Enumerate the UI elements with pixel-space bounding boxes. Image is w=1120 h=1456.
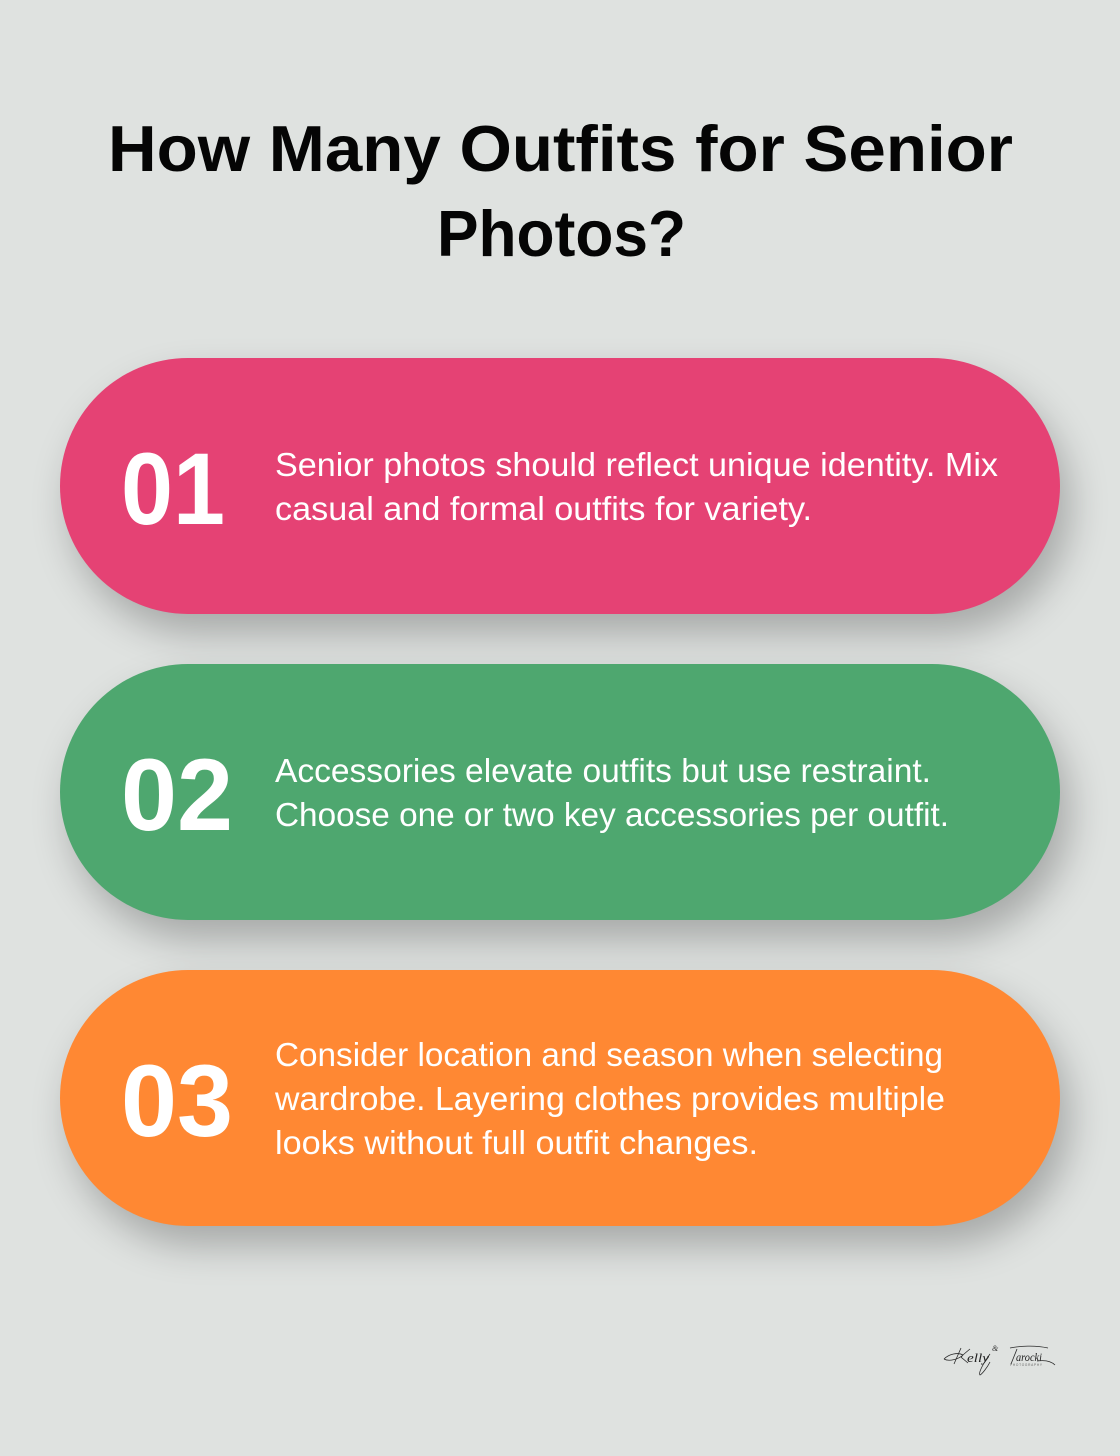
logo: Kelly & Tarocki Photography bbox=[944, 1344, 1056, 1376]
text block: step 03: looks without full outfit changes. bbox=[275, 1124, 758, 1161]
title: How Many Outfits for Senior bbox=[108, 112, 1013, 185]
text block: step 03: Consider location and season when selecting bbox=[275, 1036, 943, 1073]
number 01: 01 bbox=[121, 432, 225, 546]
title bbox=[108, 112, 1013, 270]
logo: Kelly & Tarocki Photography: PHOTOGRAPHY bbox=[1010, 1363, 1043, 1367]
text block: step 03 bbox=[274, 1036, 945, 1161]
text block: step 02: Choose one or two key accessories per outfit. bbox=[275, 796, 949, 833]
text block: step 03: wardrobe. Layering clothes provides multiple bbox=[274, 1080, 945, 1117]
number 03: 03 bbox=[121, 1044, 233, 1158]
text block: step 02 bbox=[275, 752, 949, 833]
panel: step 02 bbox=[60, 664, 1060, 920]
text block: step 01: casual and formal outfits for variety. bbox=[275, 490, 812, 527]
panel: step 01 bbox=[60, 358, 1060, 614]
logo: Kelly & Tarocki Photography: arocki bbox=[1016, 1350, 1042, 1364]
title: Photos? bbox=[437, 197, 686, 270]
logo: Kelly & Tarocki Photography: & bbox=[992, 1344, 999, 1353]
text block: step 02: Accessories elevate outfits but use restraint. bbox=[275, 752, 931, 789]
panel: step 03 bbox=[60, 970, 1060, 1226]
logo: Kelly & Tarocki Photography: elly bbox=[967, 1350, 989, 1365]
text block: step 01: Senior photos should reflect unique identity. Mix bbox=[275, 446, 999, 483]
text block: step 01 bbox=[275, 446, 999, 527]
number 02: 02 bbox=[121, 738, 233, 852]
